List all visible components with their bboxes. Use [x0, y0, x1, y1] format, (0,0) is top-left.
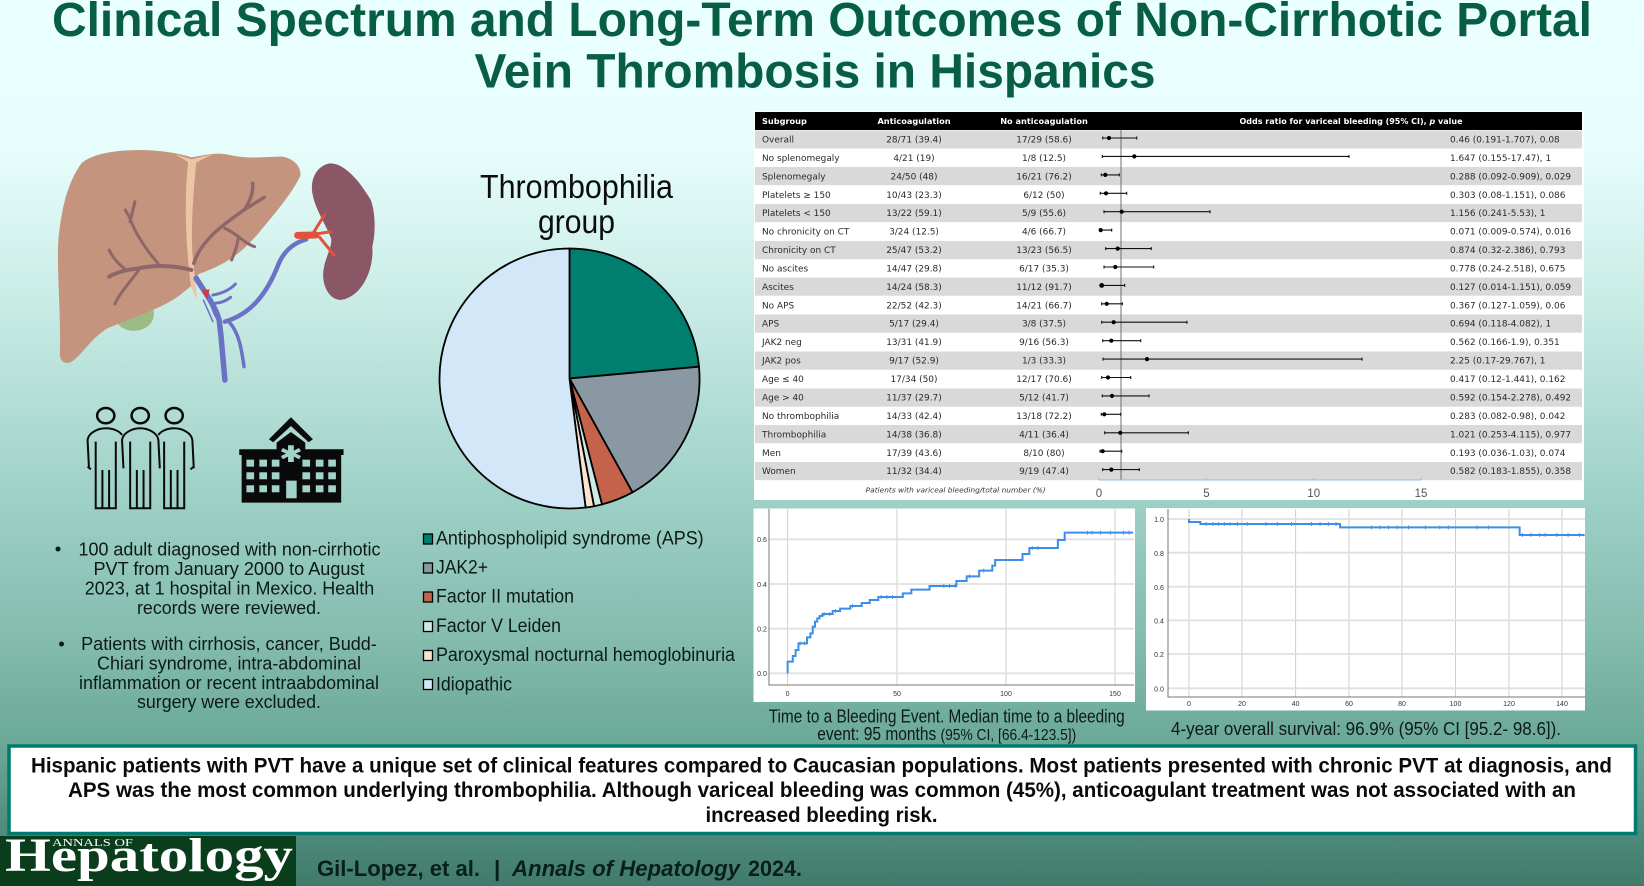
tick labels: 0.2 — [757, 626, 767, 634]
tick labels: 100 — [1450, 701, 1461, 708]
table header: Subgroup — [762, 116, 807, 126]
table columns text: 3/8 (37.5) — [1022, 320, 1066, 330]
grid lines — [769, 509, 1134, 685]
table columns text: 9/17 (52.9) — [889, 357, 939, 367]
tick labels: 1.0 — [1154, 517, 1164, 524]
table columns text: 5/9 (55.6) — [1022, 209, 1066, 219]
citation: | — [494, 856, 500, 881]
table columns text: Platelets ≥ 150 — [762, 191, 831, 201]
table columns text: JAK2 neg — [761, 338, 802, 348]
forest plot reference line — [1120, 130, 1122, 480]
table columns text: 5/12 (41.7) — [1019, 394, 1069, 404]
table columns text: Splenomegaly — [762, 172, 826, 182]
table header: Odds ratio for variceal bleeding (95% CI), p value — [1240, 116, 1463, 126]
tick labels: 100 — [1000, 691, 1012, 698]
icon: three patients — [88, 408, 194, 508]
table columns text: 0.46 (0.191-1.707), 0.08 — [1450, 136, 1560, 146]
text block: study description: records were reviewed. — [137, 597, 321, 618]
table columns text: 14/47 (29.8) — [886, 264, 942, 274]
table columns text: 17/34 (50) — [891, 375, 937, 385]
table columns text: 0.288 (0.092-0.909), 0.029 — [1450, 172, 1571, 182]
tick labels: 150 — [1109, 691, 1121, 698]
tick labels: 0.0 — [1154, 686, 1164, 694]
citation — [317, 856, 802, 881]
text block: study description: • — [55, 538, 61, 559]
table columns text: 11/32 (34.4) — [886, 467, 942, 477]
tick labels — [1154, 517, 1568, 708]
table columns text: 1/8 (12.5) — [1022, 154, 1066, 164]
table columns text — [761, 136, 1571, 477]
forest plot intervals — [1099, 136, 1362, 472]
table columns text: 3/24 (12.5) — [889, 228, 939, 238]
legend: thrombophilia group — [424, 528, 735, 696]
forest plot axis: 0 — [1096, 488, 1102, 500]
table header: Anticoagulation — [877, 116, 951, 126]
table columns text: 0.127 (0.014-1.151), 0.059 — [1450, 283, 1571, 293]
pie chart heading: group — [538, 203, 615, 240]
table columns text: 2.25 (0.17-29.767), 1 — [1450, 357, 1545, 367]
tick labels: 20 — [1238, 701, 1246, 708]
table columns text: 11/37 (29.7) — [886, 394, 942, 404]
table columns text: No thrombophilia — [762, 412, 839, 422]
icon: spleen — [312, 163, 375, 300]
table columns text: 6/17 (35.3) — [1019, 264, 1069, 274]
icon: hepatic veins — [109, 183, 264, 304]
table columns text: 0.592 (0.154-2.278), 0.492 — [1450, 394, 1571, 404]
table columns text: 0.193 (0.036-1.03), 0.074 — [1450, 449, 1566, 459]
caption: bleeding event: Time to a Bleeding Event. Median time to a bleeding — [769, 706, 1125, 726]
table columns text: 22/52 (42.3) — [886, 301, 942, 311]
tick labels: 120 — [1503, 701, 1515, 708]
chart: time to a bleeding event — [754, 508, 1135, 702]
table columns text: 0.071 (0.009-0.574), 0.016 — [1450, 228, 1571, 238]
table row bands — [755, 130, 1582, 480]
table columns text: 28/71 (39.4) — [886, 136, 942, 146]
conclusion box: Hispanic patients with PVT have a unique set of clinical features compared to Caucasian populations. Most patients presented with chronic PVT at diagnosis, and — [31, 754, 1612, 778]
tick labels: 0 — [1187, 701, 1191, 708]
tick labels: 0.8 — [1154, 551, 1164, 558]
table columns text: JAK2 pos — [761, 357, 801, 367]
table columns text: 12/17 (70.6) — [1016, 375, 1072, 385]
table columns text: 17/39 (43.6) — [886, 449, 942, 459]
text block: exclusion criteria — [58, 633, 379, 712]
table columns text: 9/16 (56.3) — [1019, 338, 1069, 348]
forest plot axis — [1096, 478, 1427, 500]
citation: Annals of Hepatology — [511, 856, 741, 881]
survival curve — [1189, 519, 1585, 537]
tick labels: 0.0 — [757, 671, 767, 678]
text block: exclusion criteria: Chiari syndrome, intra-abdominal — [97, 652, 361, 674]
table columns text: 0.283 (0.082-0.98), 0.042 — [1450, 412, 1565, 422]
tick labels: 0.4 — [1154, 618, 1164, 626]
grid lines — [1168, 509, 1585, 697]
tick labels: 140 — [1556, 701, 1568, 708]
icon: liver — [58, 150, 300, 363]
table columns text: 14/38 (36.8) — [886, 430, 942, 440]
tick labels: 50 — [893, 691, 901, 698]
legend: thrombophilia group: Antiphospholipid syndrome (APS) — [436, 528, 704, 550]
forest plot axis: 15 — [1415, 488, 1427, 500]
legend: thrombophilia group: Factor V Leiden — [436, 615, 561, 637]
table header — [755, 112, 1582, 130]
table columns text: 0.778 (0.24-2.518), 0.675 — [1450, 264, 1565, 274]
table columns text: 1/3 (33.3) — [1022, 357, 1066, 367]
forest plot axis: 5 — [1203, 488, 1210, 500]
table columns text: 13/23 (56.5) — [1016, 246, 1072, 256]
table columns text: 0.694 (0.118-4.082), 1 — [1450, 320, 1551, 330]
logo: Annals of Hepatology: ANNALS OF — [52, 838, 133, 849]
chart: overall survival — [1146, 508, 1585, 710]
table columns text: 14/33 (42.4) — [886, 412, 942, 422]
table columns text: Chronicity on CT — [762, 246, 836, 256]
text block: exclusion criteria: Patients with cirrhosis, cancer, Budd- — [81, 633, 377, 654]
legend: thrombophilia group: JAK2+ — [436, 556, 488, 578]
title — [52, 0, 1592, 98]
pie chart heading — [480, 168, 674, 240]
forest plot table — [754, 111, 1584, 500]
table columns text: No splenomegaly — [762, 154, 840, 164]
table columns text: 13/22 (59.1) — [886, 209, 942, 219]
table columns text: Thrombophilia — [761, 430, 826, 440]
tick labels: 80 — [1398, 701, 1406, 708]
text block: study description: 100 adult diagnosed with non-cirrhotic — [78, 538, 380, 560]
table columns text: 1.156 (0.241-5.53), 1 — [1450, 209, 1545, 219]
pie chart heading: Thrombophilia — [480, 168, 674, 205]
table columns text: 5/17 (29.4) — [889, 320, 939, 330]
bleeding curve — [788, 531, 1133, 673]
icon: gallbladder — [117, 307, 154, 331]
table columns text: 10/43 (23.3) — [886, 191, 942, 201]
table columns text: 4/11 (36.4) — [1019, 430, 1069, 440]
axis caption: Patients with variceal bleeding/total number (%) — [866, 486, 1046, 494]
icon: falciform ligament — [175, 154, 213, 300]
table columns text: 0.417 (0.12-1.441), 0.162 — [1450, 375, 1565, 385]
citation: 2024. — [748, 856, 802, 881]
text block: study description — [55, 538, 380, 618]
legend: thrombophilia group: Factor II mutation — [436, 586, 574, 608]
table columns text: 8/10 (80) — [1023, 449, 1065, 459]
table columns text: Women — [762, 467, 796, 477]
tick labels: 0 — [786, 691, 790, 698]
conclusion box: APS was the most common underlying thrombophilia. Although variceal bleeding was common (45%), anticoagulant treatment was not associated with an — [68, 779, 1576, 802]
legend: thrombophilia group: Idiopathic — [436, 674, 512, 696]
text block: study description: PVT from January 2000 to August — [94, 558, 365, 579]
table columns text: 1.647 (0.155-17.47), 1 — [1450, 154, 1551, 164]
table columns text: 24/50 (48) — [891, 172, 937, 182]
table columns text: 4/6 (66.7) — [1022, 228, 1066, 238]
table columns text: 1.021 (0.253-4.115), 0.977 — [1450, 430, 1571, 440]
icon: splenic artery and thrombus — [202, 215, 334, 299]
table columns text: No APS — [762, 301, 794, 311]
pie chart: thrombophilia group — [440, 248, 700, 508]
illustration: liver, spleen and portal vein — [58, 150, 375, 380]
citation: Gil-Lopez, et al. — [317, 856, 480, 881]
table columns text: 13/18 (72.2) — [1016, 412, 1072, 422]
title: Vein Thrombosis in Hispanics — [474, 46, 1156, 98]
table columns text: No ascites — [762, 264, 809, 274]
forest plot axis: 10 — [1307, 488, 1320, 500]
table columns text: Age > 40 — [762, 394, 804, 404]
table columns text: Platelets < 150 — [762, 209, 831, 219]
table columns text: 0.582 (0.183-1.855), 0.358 — [1450, 467, 1571, 477]
text block: exclusion criteria: surgery were excluded. — [137, 691, 321, 712]
axes — [1168, 509, 1585, 697]
text block: exclusion criteria: inflammation or recent intraabdominal — [79, 672, 379, 693]
icon: portal vein — [196, 239, 306, 380]
table columns text: 13/31 (41.9) — [886, 338, 942, 348]
table columns text: 0.562 (0.166-1.9), 0.351 — [1450, 338, 1560, 348]
table columns text: 4/21 (19) — [893, 154, 935, 164]
table columns text: 0.874 (0.32-2.386), 0.793 — [1450, 246, 1565, 256]
text block: exclusion criteria: • — [58, 633, 65, 654]
tick labels — [757, 537, 1121, 698]
tick labels: 60 — [1345, 701, 1353, 708]
legend: thrombophilia group: Paroxysmal nocturnal hemoglobinuria — [436, 644, 735, 666]
table columns text: 0.367 (0.127-1.059), 0.06 — [1450, 301, 1566, 311]
caption: bleeding event — [769, 706, 1125, 744]
table columns text: Overall — [762, 136, 794, 146]
conclusion box: increased bleeding risk. — [706, 804, 938, 827]
table header: No anticoagulation — [1000, 116, 1088, 126]
table columns text: Ascites — [762, 283, 794, 293]
tick labels: 0.4 — [757, 582, 767, 589]
table columns text: Men — [762, 449, 781, 459]
text block: study description: 2023, at 1 hospital in Mexico. Health — [85, 578, 374, 598]
table columns text: 16/21 (76.2) — [1016, 172, 1072, 182]
caption: bleeding event: event: 95 months (95% CI, [66.4-123.5]) — [817, 724, 1076, 744]
tick labels: 40 — [1292, 701, 1300, 708]
table columns text: 17/29 (58.6) — [1016, 136, 1072, 146]
table columns text: 0.303 (0.08-1.151), 0.086 — [1450, 191, 1566, 201]
icon: hospital — [239, 417, 344, 503]
table columns text: 14/24 (58.3) — [886, 283, 942, 293]
table columns text: APS — [762, 320, 780, 330]
table columns text: 9/19 (47.4) — [1019, 467, 1069, 477]
table columns text: 11/12 (91.7) — [1016, 283, 1072, 293]
tick labels: 0.2 — [1154, 652, 1164, 659]
table columns text: 6/12 (50) — [1023, 191, 1065, 201]
table columns text: 14/21 (66.7) — [1016, 301, 1072, 311]
table columns text: Age ≤ 40 — [762, 375, 804, 385]
table columns text: No chronicity on CT — [762, 228, 850, 238]
logo: Annals of Hepatology: Hepatology — [5, 829, 293, 882]
axes — [769, 509, 1134, 685]
tick labels: 0.6 — [1154, 585, 1164, 592]
conclusion box — [9, 746, 1636, 834]
table columns text: 25/47 (53.2) — [886, 246, 942, 256]
caption: overall survival: 4-year overall survival: 96.9% (95% CI [95.2- 98.6]). — [1171, 718, 1561, 739]
tick labels: 0.6 — [757, 537, 767, 544]
